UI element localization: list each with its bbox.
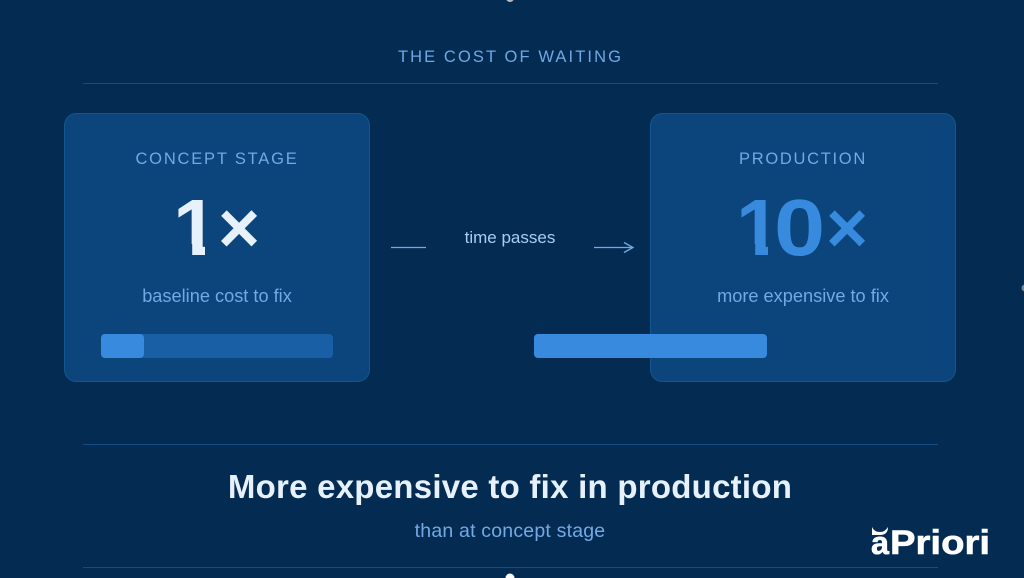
- card background: [64, 114, 370, 382]
- headline: More expensive to fix in production: [228, 468, 792, 505]
- value: 1x: [168, 183, 260, 272]
- value: 10x: 0: [774, 184, 825, 273]
- arrow: time passes: [391, 228, 633, 252]
- value: 10x: ×: [826, 188, 868, 268]
- logo: aPriori: Priori: [890, 524, 990, 562]
- cost bar: concept: [101, 334, 333, 358]
- bottom glow dot: [506, 574, 514, 578]
- right edge glow dot: [1022, 284, 1024, 292]
- value: 1x: ×: [218, 188, 260, 268]
- caption: baseline cost: baseline cost to fix: [142, 286, 292, 306]
- top glow dot: [506, 0, 514, 2]
- subheadline: than at concept stage: [415, 520, 605, 542]
- label: concept stage: CONCEPT STAGE: [135, 150, 299, 168]
- value: 1x: 1: [173, 183, 218, 272]
- value: 10x: [731, 183, 868, 273]
- logo: aPriori: a: [871, 525, 889, 561]
- arrow: time passes: time passes: [465, 228, 555, 247]
- panel: production: [650, 114, 956, 382]
- panel: concept stage: [64, 114, 370, 382]
- title: THE COST OF WAITING: [398, 48, 623, 66]
- caption: more expensive: more expensive to fix: [717, 286, 889, 306]
- label: production: PRODUCTION: [739, 150, 867, 168]
- cost bar: production: [534, 334, 767, 358]
- value: 10x: 1: [736, 183, 780, 272]
- card background: [650, 114, 956, 382]
